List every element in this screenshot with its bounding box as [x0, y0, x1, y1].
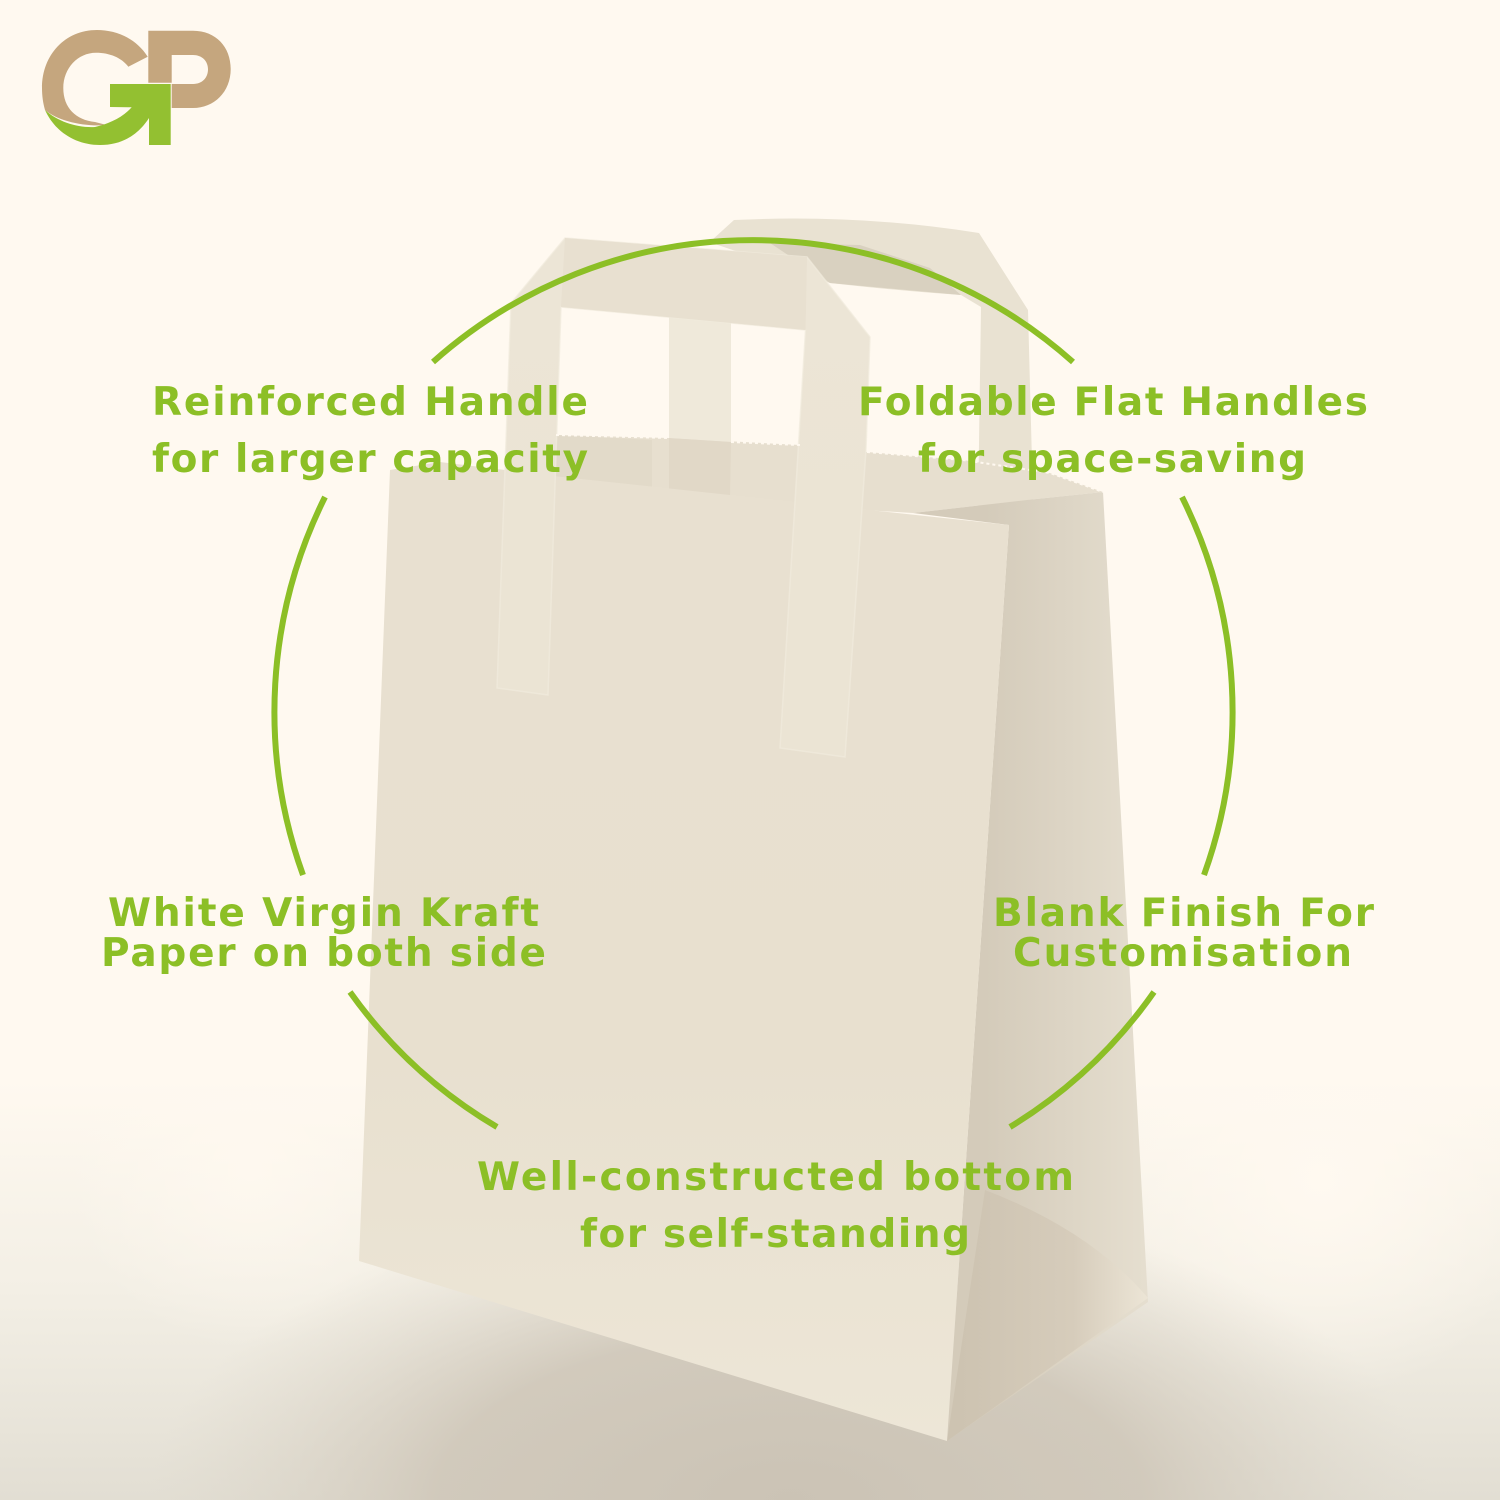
serrated paper edges — [556, 435, 1103, 492]
back wall with inner shadow — [553, 435, 1103, 513]
label: blank finish: Blank Finish For — [993, 891, 1375, 936]
gusset bottom fold — [947, 1190, 1148, 1441]
label: blank finish — [993, 891, 1375, 976]
front handle — [497, 238, 870, 757]
label: white virgin kraft paper: White Virgin Kraft — [108, 891, 539, 936]
side gusset — [913, 492, 1148, 1441]
label: foldable flat handles: Foldable Flat Handles — [858, 380, 1368, 425]
front handle top band — [561, 238, 807, 330]
back handle — [712, 219, 1033, 512]
label: foldable flat handles: for space-saving — [918, 437, 1306, 482]
logo: GP — [42, 30, 231, 145]
label: reinforced handle — [152, 380, 588, 482]
back handle centre strap — [669, 317, 731, 442]
label: well-constructed bottom: for self-standing — [580, 1212, 970, 1257]
label: reinforced handle: Reinforced Handle — [152, 380, 588, 425]
label: white virgin kraft paper — [101, 891, 546, 976]
circle arcs — [274, 240, 1233, 1127]
paper bag photo — [359, 219, 1148, 1441]
floor shadow — [150, 1190, 1430, 1500]
label: blank finish: Customisation — [1013, 931, 1352, 976]
label: reinforced handle: for larger capacity — [152, 437, 588, 482]
label: foldable flat handles — [858, 380, 1368, 482]
label: well-constructed bottom — [477, 1155, 1074, 1257]
label: white virgin kraft paper: Paper on both side — [101, 931, 546, 976]
front face — [359, 462, 1009, 1441]
label: well-constructed bottom: Well-constructed bottom — [477, 1155, 1074, 1200]
